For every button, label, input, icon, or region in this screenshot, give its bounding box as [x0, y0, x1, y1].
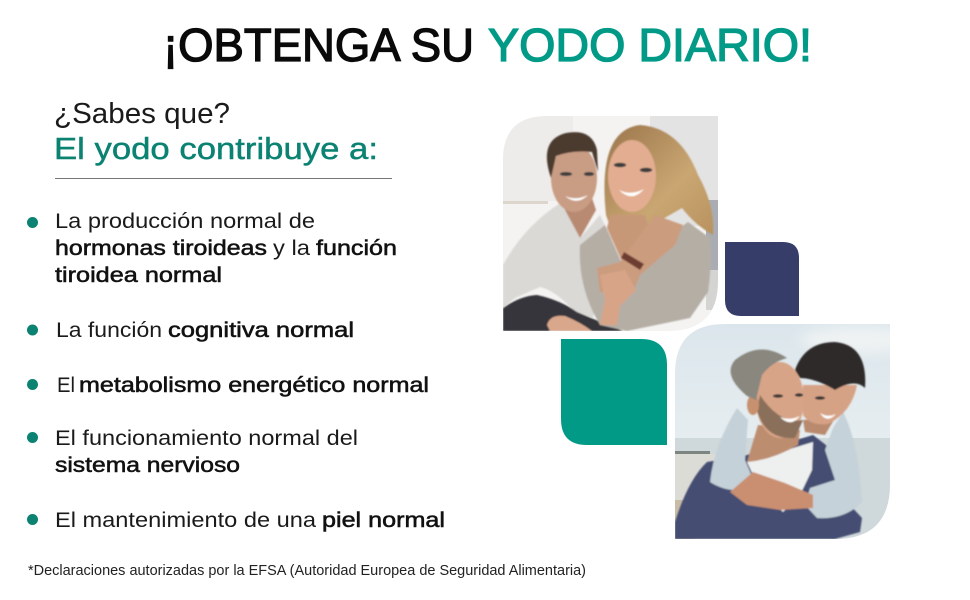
fist and forearm	[600, 270, 636, 325]
arm	[597, 215, 683, 292]
man's jacket	[675, 435, 862, 539]
man's hair	[547, 132, 598, 178]
photo: couple on beach	[675, 324, 890, 539]
footnote: *Declaraciones autorizadas por la EFSA (Autoridad Europea de Seguridad Alimentaria)	[28, 563, 586, 579]
title: ¡OBTENGA SU	[163, 19, 474, 71]
navy square	[725, 242, 799, 316]
woman's face	[608, 140, 656, 212]
benefit: hormonas tiroideas: y la	[273, 236, 310, 260]
benefit: hormonas tiroideas: tiroidea normal	[55, 263, 222, 287]
title	[163, 19, 812, 71]
heading: El yodo contribuye a: El yodo contribuye a:	[54, 131, 378, 166]
title: YODO DIARIO!	[488, 19, 812, 71]
benefit: función cognitiva: cognitiva normal	[168, 318, 354, 342]
woman's hair	[604, 125, 713, 235]
benefit: sistema nervioso	[27, 426, 358, 477]
man's neck	[747, 425, 800, 462]
bullet	[27, 379, 38, 390]
woman's right arm	[805, 412, 862, 518]
benefit: metabolismo energético: El	[57, 373, 75, 397]
man's neck	[562, 198, 596, 238]
benefit: sistema nervioso: El funcionamiento normal del	[55, 426, 358, 450]
benefit: piel normal	[27, 508, 445, 532]
woman's face	[803, 385, 857, 424]
benefit: hormonas tiroideas: La producción normal de	[55, 209, 315, 233]
benefit: función cognitiva: La función	[56, 318, 162, 342]
benefit: sistema nervioso: sistema nervioso	[55, 453, 240, 477]
bullet	[27, 432, 38, 443]
white shirt	[747, 442, 813, 512]
benefit: hormonas tiroideas	[27, 209, 397, 287]
subtitle: ¿Sabes que?: ¿Sabes que?	[54, 98, 230, 130]
benefit: piel normal: piel normal	[322, 508, 445, 532]
lower hand	[547, 316, 592, 331]
woman's top	[580, 222, 711, 331]
benefit: hormonas tiroideas: función	[316, 236, 397, 260]
benefit: metabolismo energético: metabolismo energético normal	[79, 373, 429, 397]
jeans	[503, 295, 623, 331]
man's ear	[747, 395, 759, 415]
benefit: función cognitiva	[27, 318, 354, 342]
man's hair	[731, 349, 787, 400]
bullet	[27, 514, 38, 525]
woman's hand	[730, 472, 813, 510]
man's shirt	[503, 202, 612, 318]
bullet	[27, 217, 38, 228]
man's head	[756, 362, 804, 438]
chest	[606, 215, 647, 260]
man's smile	[565, 195, 588, 201]
man's smile	[780, 416, 800, 422]
bracelet	[621, 252, 644, 270]
benefit: hormonas tiroideas: hormonas tiroideas	[55, 236, 267, 260]
bullet	[27, 324, 38, 336]
photo: couple indoors	[503, 116, 718, 331]
man's head	[551, 144, 597, 212]
woman's left arm	[710, 408, 757, 490]
woman's hair	[795, 342, 865, 390]
woman's neck	[803, 418, 835, 435]
teal square	[561, 339, 667, 445]
benefit: piel normal: El mantenimiento de una	[55, 508, 316, 532]
woman's smile	[820, 413, 836, 419]
